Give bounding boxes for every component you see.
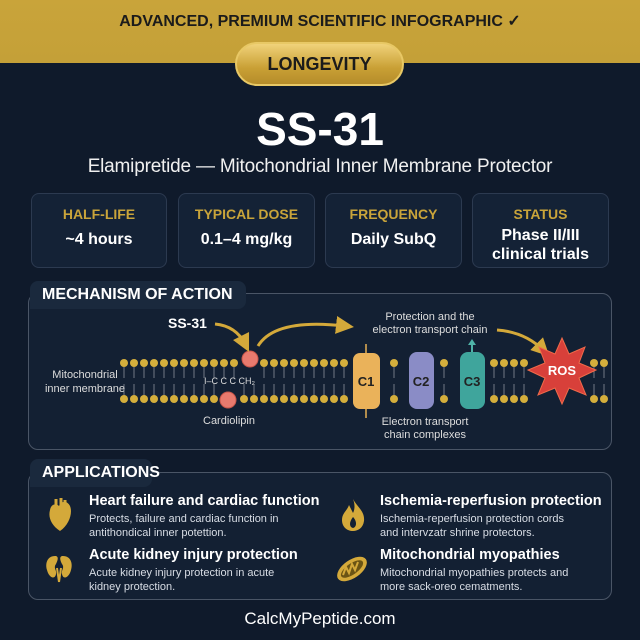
- text: Ischemia-reperfusion protection: [380, 493, 602, 509]
- ROS burst: ROS: [548, 363, 576, 378]
- subtitle: Elamipretide — Mitochondrial Inner Membrane Protector: [88, 156, 552, 177]
- text: antithondical inner potettion.: [89, 527, 227, 539]
- stat: status: clinical trials: [492, 246, 589, 263]
- complexes C1 C2 C3: C2: [413, 374, 429, 389]
- complexes C1 C2 C3: C3: [464, 374, 480, 389]
- footer: CalcMyPeptide.com: [244, 609, 396, 628]
- icon: flame: [342, 499, 364, 531]
- label: membrane: Mitochondrial: [52, 369, 118, 381]
- longevity pill: LONGEVITY: [267, 54, 372, 74]
- stat: half-life: [31, 193, 167, 268]
- stat: frequency: [325, 193, 462, 268]
- text: Mitochondrial myopathies: [380, 547, 560, 563]
- text: more sack-oreo cematments.: [380, 581, 522, 593]
- protection text: Protection and the: [385, 311, 475, 323]
- cardiolipin: I–C C C CH₂: [204, 376, 256, 386]
- panel: applications: [28, 472, 612, 600]
- applications heading: [30, 459, 152, 487]
- stat: half-life: HALF-LIFE: [63, 206, 135, 222]
- cardiolipin: [203, 351, 258, 427]
- stat: frequency: Daily SubQ: [351, 231, 436, 248]
- stat: frequency: FREQUENCY: [350, 206, 437, 222]
- ROS burst: [528, 338, 596, 404]
- complexes C1 C2 C3: C1: [358, 374, 374, 389]
- text: Ischemia-reperfusion protection cords: [380, 513, 564, 525]
- ETC label: Electron transport: [382, 416, 468, 428]
- panel: mechanism: [28, 293, 612, 450]
- text: Protects, failure and cardiac function in: [89, 513, 279, 525]
- stat: status: [472, 193, 609, 268]
- stat: dose: 0.1–4 mg/kg: [201, 231, 292, 248]
- text: and intervzatr shrine protectors.: [380, 527, 535, 539]
- top gold band: [0, 0, 640, 63]
- stat: status: STATUS: [514, 206, 567, 222]
- mechanism heading: MECHANISM OF ACTION: [42, 286, 233, 303]
- mechanism heading: [30, 281, 246, 309]
- complexes C1 C2 C3: [353, 339, 485, 418]
- applications heading: APPLICATIONS: [42, 464, 160, 481]
- app 3: [89, 547, 298, 593]
- app 2: [380, 493, 602, 539]
- icon: mitochondrion: [337, 556, 367, 582]
- text: Mitochondrial myopathies protects and: [380, 567, 568, 579]
- app 4: [380, 547, 568, 593]
- text: Acute kidney injury protection: [89, 547, 298, 563]
- title: SS-31: [256, 103, 384, 155]
- top banner text: ADVANCED, PREMIUM SCIENTIFIC INFOGRAPHIC ✓: [119, 13, 521, 30]
- ETC label: chain complexes: [384, 429, 466, 441]
- stat: dose: [178, 193, 315, 268]
- stat: half-life: ~4 hours: [65, 231, 133, 248]
- stat: dose: TYPICAL DOSE: [195, 206, 298, 222]
- longevity pill: [235, 42, 404, 86]
- cardiolipin: Cardiolipin: [203, 415, 255, 427]
- label: membrane: inner membrane: [45, 383, 125, 395]
- protection text: electron transport chain: [373, 324, 487, 336]
- text: Acute kidney injury protection in acute: [89, 567, 274, 579]
- icon: kidneys: [46, 556, 72, 582]
- SS-31 label and arrows: SS-31: [168, 315, 207, 331]
- SS-31 label and arrows: [168, 315, 543, 350]
- stat: status: Phase II/III: [501, 227, 580, 244]
- icon: heart: [49, 498, 71, 531]
- app 1: [89, 493, 319, 539]
- text: Heart failure and cardiac function: [89, 493, 319, 509]
- text: kidney protection.: [89, 581, 175, 593]
